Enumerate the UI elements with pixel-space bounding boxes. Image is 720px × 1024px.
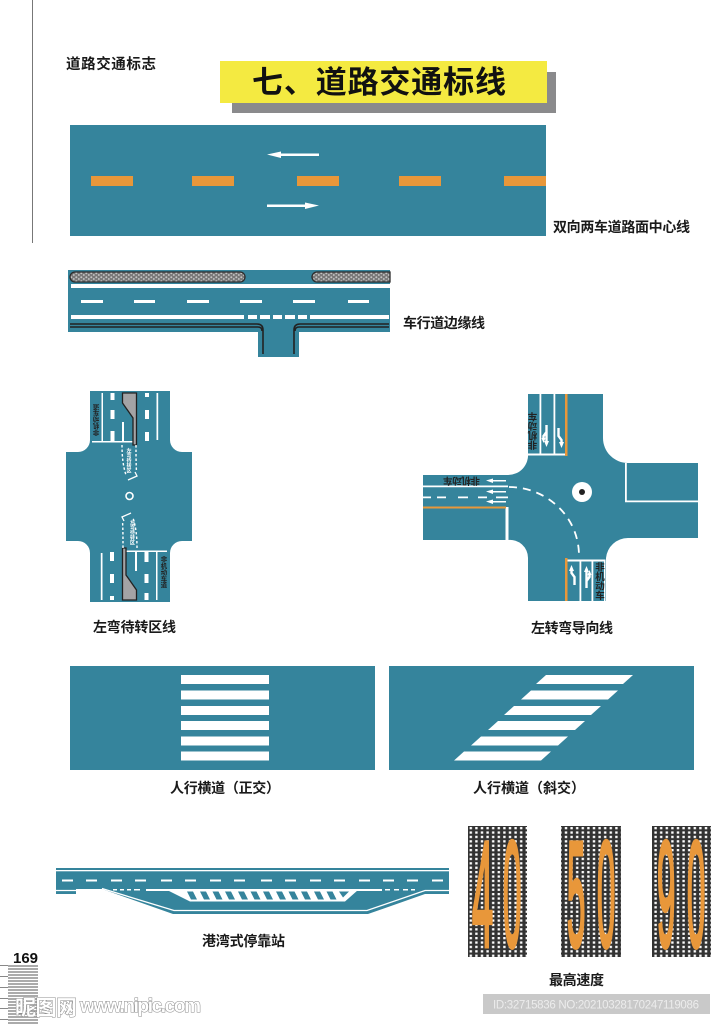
speed marking: 90: 0 — [687, 812, 705, 979]
panel: bus bay — [56, 868, 449, 914]
speed marking: 50: 5 — [567, 812, 585, 979]
panel: left-turn waiting area: 非机动车道 — [160, 555, 167, 589]
title banner — [220, 61, 556, 113]
page edge stripes — [0, 965, 38, 1023]
label: maximum speed: 最高速度 — [549, 972, 604, 988]
label: diagonal crosswalk: 人行横道（斜交） — [473, 780, 585, 796]
label: two-way centre line: 双向两车道路面中心线 — [553, 219, 690, 235]
image id bar — [483, 994, 710, 1014]
page margin line — [32, 0, 33, 243]
section label: 道路交通标志 — [66, 55, 156, 73]
watermark: 昵图网 — [15, 997, 77, 1020]
speed marking: 90 — [652, 812, 711, 979]
panel: left-turn waiting area — [66, 391, 192, 602]
panel: left-turn guide line: 非机动车 — [593, 561, 605, 601]
panel: diagonal crosswalk — [389, 666, 694, 770]
panel: left-turn guide line — [423, 394, 698, 601]
panel: left-turn waiting area: 非机动车道 — [93, 403, 100, 437]
panel: carriageway edge line — [68, 270, 390, 357]
speed marking: 40 — [468, 812, 527, 979]
title banner: 七、道路交通标线 — [252, 65, 506, 100]
panel: perpendicular crosswalk — [70, 666, 375, 770]
watermark — [15, 996, 201, 1020]
speed marking: 40: 4 — [472, 812, 493, 979]
page number: 169 — [13, 950, 38, 967]
label: bus bay: 港湾式停靠站 — [202, 933, 285, 949]
panel: left-turn guide line: 非机动车 — [443, 474, 480, 486]
panel: left-turn waiting area: 左弯待转区 — [129, 519, 135, 545]
panel: left-turn waiting area: 左弯待转区 — [126, 447, 132, 473]
label: carriageway edge line: 车行道边缘线 — [403, 315, 485, 331]
speed marking: 40: 0 — [503, 812, 521, 979]
panel: two-way centre line — [70, 125, 546, 236]
speed marking: 50: 0 — [597, 812, 615, 979]
speed marking: 90: 9 — [657, 812, 675, 979]
image id bar: ID:32715836 NO:20210328170247119086 — [493, 1000, 699, 1012]
label: left-turn guide line: 左转弯导向线 — [531, 620, 613, 636]
label: left-turn waiting area: 左弯待转区线 — [93, 619, 176, 635]
watermark: www.nipic.com — [79, 996, 201, 1017]
speed marking: 50 — [561, 812, 621, 979]
panel: left-turn guide line: 非机动车 — [528, 411, 540, 451]
label: perpendicular crosswalk: 人行横道（正交） — [170, 780, 280, 796]
